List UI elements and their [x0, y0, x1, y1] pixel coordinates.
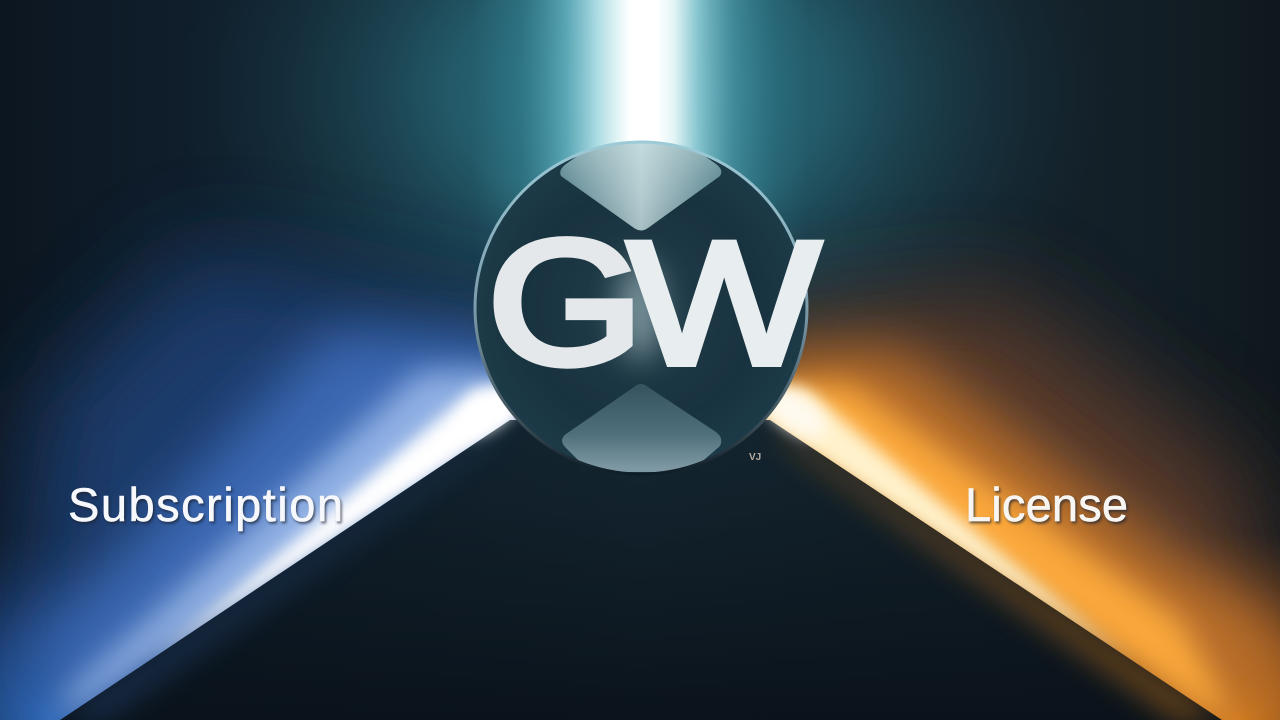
- logo letters GW: G: [488, 205, 643, 401]
- label: Subscription: Subscription: [68, 478, 343, 531]
- glass ring: [475, 142, 807, 474]
- light beam: top teal: [248, 0, 1037, 314]
- label: License: License: [965, 478, 1128, 531]
- glass disc: [475, 142, 807, 474]
- center glow: [618, 260, 662, 360]
- logo letters GW: W: [628, 206, 820, 402]
- light beam: blue subscription: [0, 250, 525, 720]
- center logo badge: [475, 140, 820, 474]
- glass panel: bottom: [562, 384, 721, 472]
- glass panel: top: [560, 140, 721, 230]
- light beam: orange license: [756, 290, 1280, 720]
- logo letters GW: [488, 205, 820, 402]
- small mark: VJ: [749, 452, 761, 463]
